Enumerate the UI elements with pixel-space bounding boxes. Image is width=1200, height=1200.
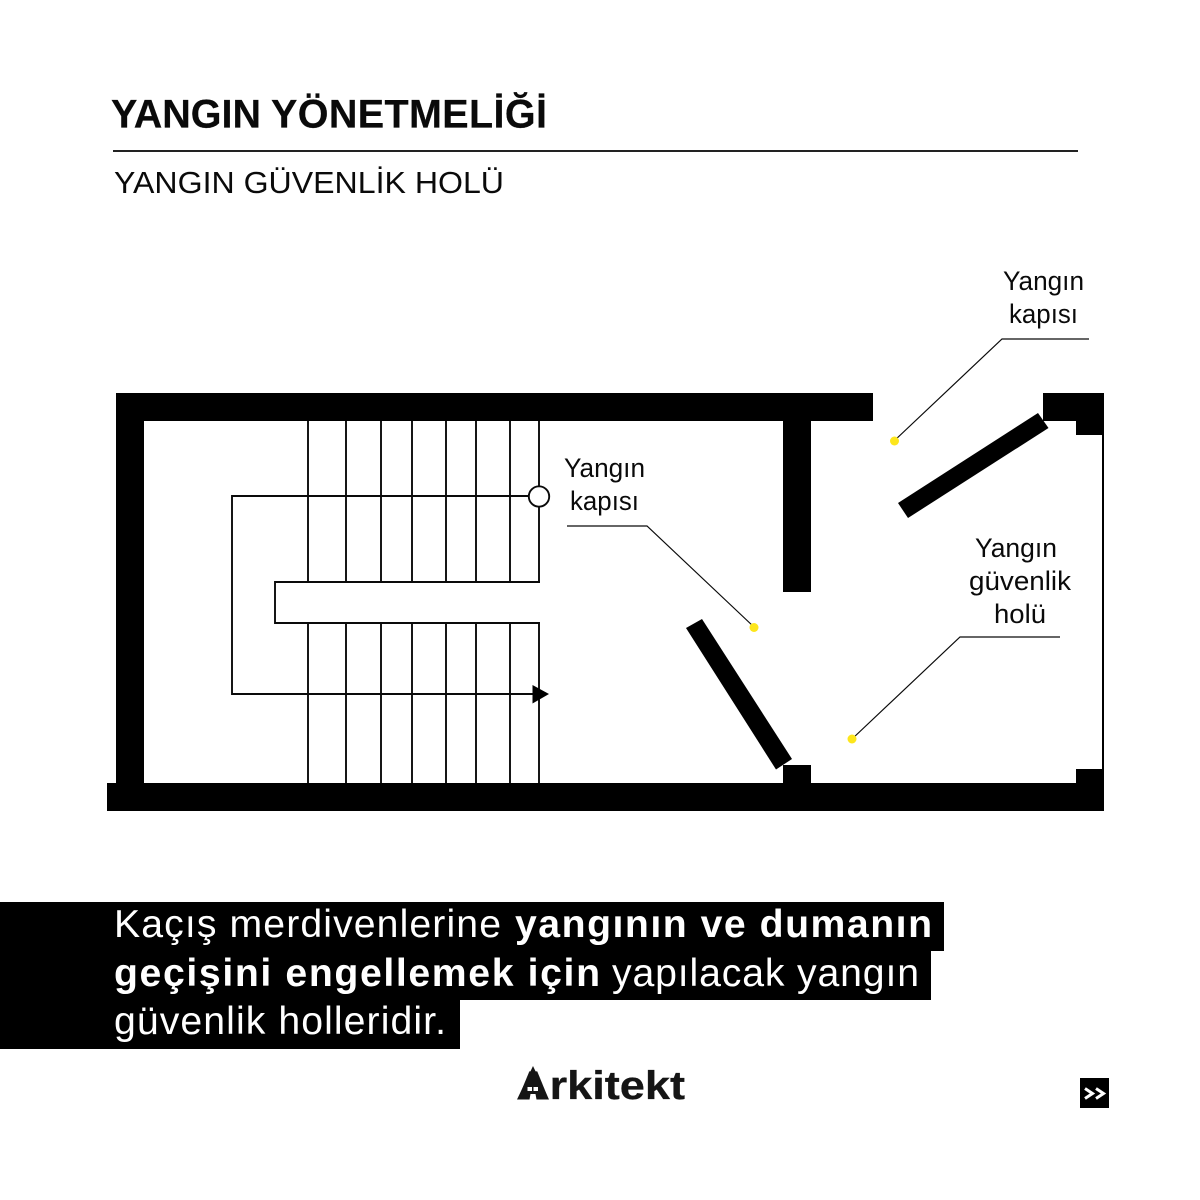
callout: fire safety lobby: holü [994,599,1046,629]
callout: stair fire door: kapısı [570,486,639,516]
stair start circle [529,486,549,507]
callout: upper fire door [890,266,1089,446]
text block: description [0,902,944,1049]
callout: fire safety lobby [848,533,1072,744]
title [111,92,547,136]
callout: upper fire door: kapısı [1009,299,1078,329]
walls [107,393,1104,811]
callout: stair fire door [564,453,758,632]
staircase [232,421,540,783]
text block: description: Kaçış merdivenlerine [114,903,501,946]
callout: upper fire door: Yangın [1003,266,1084,296]
subtitle: YANGIN GÜVENLİK HOLÜ [114,165,504,200]
title: YÖNETMELİĞİ [271,92,547,136]
text block: description: yapılacak yangın [612,952,919,995]
icon: next arrows [1080,1078,1109,1108]
text block: description: güvenlik holleridir. [114,1000,446,1043]
door: stair side [686,619,792,770]
door: upper right [898,413,1048,518]
text block: description: geçişini engellemek için [114,952,600,995]
callout: stair fire door: Yangın [564,453,645,483]
callout: fire safety lobby: Yangın [975,533,1057,563]
callout: fire safety lobby: güvenlik [969,566,1072,596]
logo: Arkitekt: Arkitekt [517,1064,685,1108]
floor plan [107,266,1104,811]
text block: description: yangının ve dumanın [515,903,932,946]
stair direction arrow [532,685,549,704]
title: YANGIN [111,92,261,136]
